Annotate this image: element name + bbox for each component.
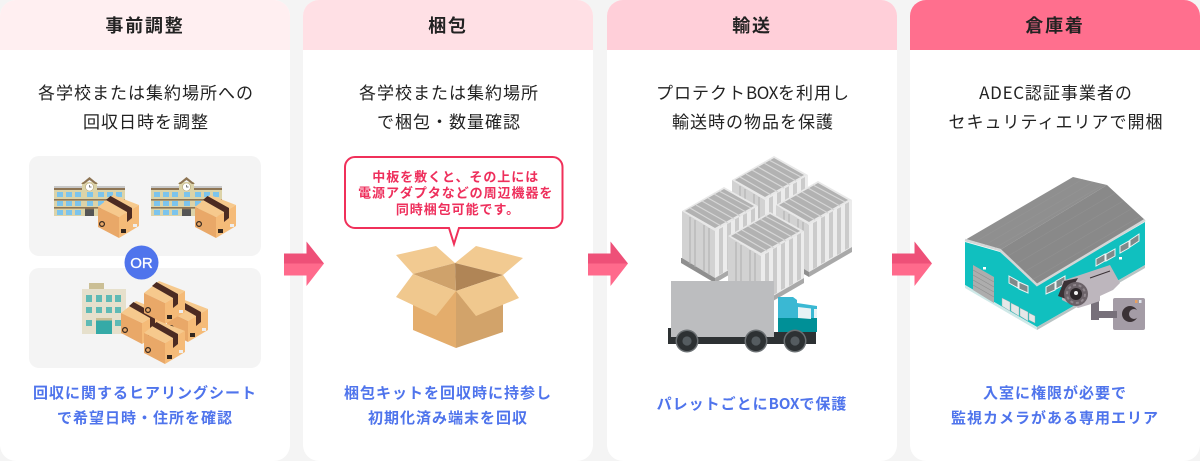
icon: office building with stacked boxes: [82, 281, 208, 364]
icon: open cardboard box: [396, 246, 523, 348]
text: 事前調整 note: で希望日時・住所を確認: [57, 410, 233, 427]
panel: school option: [29, 156, 261, 256]
arrow: step 2 to 3: [588, 242, 628, 286]
text: 事前調整 note: 回収に関するヒアリングシート: [33, 385, 257, 402]
panel: 事前調整: [0, 0, 290, 461]
arrow: step 1 to 2: [284, 242, 324, 286]
text: 倉庫着 note: [951, 385, 1159, 427]
text: 輸送 description: 輸送時の物品を保護: [672, 113, 834, 132]
text: 事前調整 note: [33, 385, 257, 427]
text: 梱包 note: 初期化済み端末を回収: [368, 410, 528, 427]
text: 倉庫着 note: 入室に権限が必要で: [983, 385, 1127, 402]
callout: speech bubble: 同時梱包可能です。: [396, 202, 520, 217]
text: 事前調整 description: [38, 84, 254, 132]
heading: 輸送: [607, 0, 897, 50]
icon: warehouse with security camera: [965, 177, 1145, 330]
badge: OR: OR: [130, 255, 153, 272]
text: 梱包 description: で梱包・数量確認: [377, 113, 521, 132]
text: 事前調整 description: 回収日時を調整: [83, 113, 209, 132]
heading: 倉庫着: 倉庫着: [1025, 16, 1085, 36]
arrow: step 3 to 4: [892, 242, 932, 286]
callout: speech bubble: 電源アダプタなどの周辺機器を: [358, 186, 553, 200]
text: 倉庫着 description: ADEC認証事業者の: [979, 79, 1133, 104]
text: 梱包 description: [359, 84, 539, 132]
heading: 梱包: 梱包: [428, 16, 468, 36]
heading: 事前調整: 事前調整: [105, 16, 185, 36]
callout: speech bubble: 中板を敷くと、その上には: [372, 170, 539, 184]
text: 事前調整 description: 各学校または集約場所への: [38, 84, 254, 103]
icon: containers and truck: [668, 156, 852, 352]
icon: school with box (right): [151, 177, 236, 238]
text: 倉庫着 description: [948, 79, 1163, 132]
text: 倉庫着 note: 監視カメラがある専用エリア: [951, 410, 1159, 427]
text: 梱包 note: 梱包キットを回収時に持参し: [344, 385, 552, 402]
panel: collection point option: [29, 268, 261, 368]
icon: school with box (left): [54, 177, 139, 238]
text: 倉庫着 description: セキュリティエリアで開梱: [948, 113, 1163, 132]
heading: 輸送: 輸送: [732, 16, 772, 36]
panel: 梱包: [303, 0, 593, 461]
text: 輸送 note: パレットごとにBOXで保護: [657, 393, 847, 414]
text: 輸送 description: [656, 79, 850, 132]
heading: 倉庫着: [910, 0, 1200, 50]
heading: 梱包: [303, 0, 593, 50]
callout: speech bubble: [345, 157, 562, 244]
text: 輸送 description: プロテクトBOXを利用し: [656, 79, 850, 104]
badge: OR: [124, 246, 158, 280]
heading: 事前調整: [0, 0, 290, 50]
panel: 倉庫着: [910, 0, 1200, 461]
text: 梱包 description: 各学校または集約場所: [359, 84, 539, 103]
text: 梱包 note: [344, 385, 552, 427]
panel: 輸送: [607, 0, 897, 461]
